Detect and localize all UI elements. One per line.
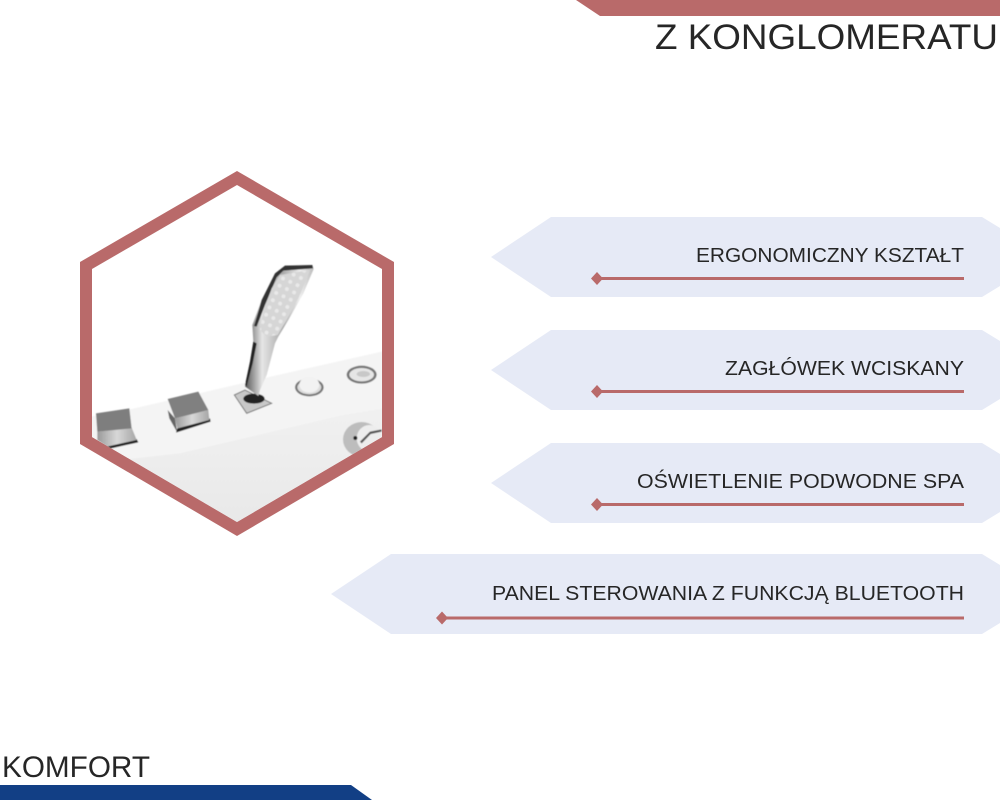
panel background	[491, 217, 1000, 297]
round button	[295, 377, 324, 396]
feature panel 1	[491, 217, 1000, 297]
feature panel 2	[491, 330, 1000, 410]
feature label: ZAGŁÓWEK WCISKANY	[725, 357, 964, 380]
category heading: KOMFORT	[2, 751, 150, 784]
title: material: Z KONGLOMERATU	[655, 18, 998, 57]
tub front wall	[166, 480, 308, 522]
tub rim deck	[92, 352, 382, 459]
panel background	[491, 443, 1000, 523]
feature label: ERGONOMICZNY KSZTAŁT	[696, 244, 964, 267]
side dial	[343, 422, 382, 457]
feature label: OŚWIETLENIE PODWODNE SPA	[637, 469, 964, 493]
hexagon photo: bathtub control panel	[80, 171, 394, 550]
hexagon interior	[92, 185, 382, 522]
bathtub photo	[92, 264, 382, 522]
underline with diamond	[591, 385, 964, 398]
underline with diamond	[436, 612, 964, 624]
underline with diamond	[591, 272, 964, 285]
underline with diamond	[591, 498, 964, 511]
top accent bar	[576, 0, 1000, 16]
feature panel 3	[491, 443, 1000, 523]
round jet control	[347, 366, 377, 384]
feature label: PANEL STEROWANIA Z FUNKCJĄ BLUETOOTH	[492, 582, 964, 605]
left valve knob	[96, 408, 138, 449]
hexagon frame	[80, 171, 394, 536]
shower head handle	[234, 265, 314, 413]
feature panel 4	[331, 554, 1000, 634]
bottom accent bar	[0, 785, 372, 800]
panel background	[491, 330, 1000, 410]
middle valve knob	[168, 392, 211, 433]
panel background	[331, 554, 1000, 634]
